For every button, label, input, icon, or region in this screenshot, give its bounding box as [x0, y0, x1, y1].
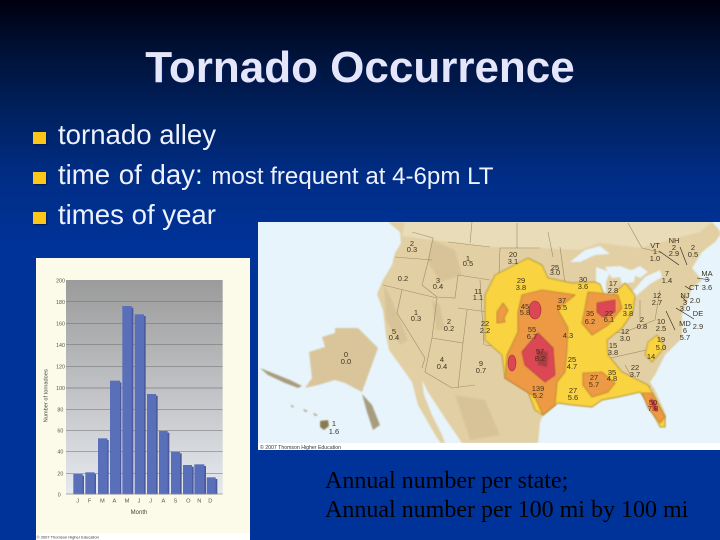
state frequency labels, east: 25 — [568, 355, 576, 364]
state frequency labels, west: 0.5 — [463, 259, 473, 268]
state frequency labels, east: 2.0 — [690, 296, 700, 305]
state frequency labels, east: 6.7 — [527, 332, 537, 341]
state frequency labels, east: 2.9 — [693, 322, 703, 331]
month labels: J — [149, 499, 152, 505]
bullet: tornado alley: tornado alley — [58, 119, 216, 150]
bullet marker 3 — [33, 212, 46, 224]
state frequency labels, west: 5 — [392, 327, 396, 336]
state frequency labels, east: 3.8 — [608, 348, 618, 357]
state frequency labels, west: 0.4 — [437, 362, 447, 371]
y axis title: Number of tornadoes — [43, 369, 49, 422]
state frequency labels, east: 37 — [558, 296, 566, 305]
state frequency labels, east: 1 — [653, 247, 657, 256]
y axis labels: 120 — [56, 365, 65, 371]
state frequency labels, east: 57 — [536, 347, 544, 356]
state frequency labels, west — [329, 239, 490, 436]
state frequency labels, west: 1.6 — [329, 427, 339, 436]
month labels: M — [100, 499, 105, 505]
state frequency labels, east: 35 — [586, 309, 594, 318]
state frequency labels, east: 3.6 — [578, 282, 588, 291]
Florida label: 50 — [649, 398, 657, 407]
bullet: time of day: time of day: most frequent at 4-6pm LT — [58, 159, 493, 190]
y axis labels: 40 — [57, 450, 63, 456]
state frequency labels, east: 3 — [705, 275, 709, 284]
state frequency labels, west: 0.2 — [398, 274, 408, 283]
state frequency labels, west: 4 — [440, 355, 444, 364]
state frequency labels, west: 0.4 — [389, 333, 399, 342]
y axis labels: 140 — [56, 343, 65, 349]
month labels: S — [173, 499, 177, 505]
y axis labels — [56, 278, 65, 498]
state frequency labels, west: 2 — [410, 239, 414, 248]
state frequency labels, east: 19 — [657, 335, 665, 344]
state frequency labels, west: 0.3 — [407, 245, 417, 254]
tornado frequency: yellow zone — [485, 258, 665, 427]
y axis labels: 180 — [56, 300, 65, 306]
state frequency labels, east: 3.0 — [620, 334, 630, 343]
state frequency labels, east: 10 — [657, 317, 665, 326]
state frequency labels, east: 5.8 — [520, 308, 530, 317]
state frequency labels, west: 1 — [466, 254, 470, 263]
panel: monthly tornado bar chart — [36, 258, 250, 540]
state frequency labels, west: 0.4 — [433, 282, 443, 291]
y axis labels: 160 — [56, 322, 65, 328]
month labels: J — [76, 499, 79, 505]
state frequency labels, east: 35 — [608, 368, 616, 377]
y axis labels: 200 — [56, 278, 65, 284]
state frequency labels, east — [508, 236, 713, 402]
state frequency labels, east: NH — [669, 236, 679, 245]
month labels: A — [112, 499, 116, 505]
state frequency labels, east: 3.8 — [516, 283, 526, 292]
state frequency labels, west: 0.2 — [444, 324, 454, 333]
state frequency labels, east: 30 — [579, 275, 587, 284]
state frequency labels, east: 2 — [672, 243, 676, 252]
state frequency labels, west: 2.2 — [480, 326, 490, 335]
state frequency labels, east: 5.6 — [568, 393, 578, 402]
state frequency labels, east: 17 — [609, 279, 617, 288]
state frequency labels, east: 3 — [683, 298, 687, 307]
state frequency labels, west: 3 — [436, 276, 440, 285]
bullet: times of year: times of year — [58, 199, 216, 230]
Great Lakes — [570, 246, 662, 302]
state frequency labels, east: 27 — [569, 386, 577, 395]
land: Canada tint — [402, 222, 712, 250]
tornado frequency: orange zones — [505, 290, 575, 415]
month labels: D — [208, 499, 212, 505]
state frequency labels, east: 2.7 — [652, 298, 662, 307]
state frequency labels, east: 8.2 — [535, 354, 545, 363]
state frequency labels, east: 3.6 — [702, 283, 712, 292]
state frequency labels, east: 1.4 — [662, 276, 672, 285]
tornado frequency: red zones — [522, 333, 555, 382]
state frequency labels, east: 14 — [647, 352, 655, 361]
y axis labels: 80 — [57, 407, 63, 413]
state frequency labels, east: 2.8 — [608, 286, 618, 295]
state borders — [383, 222, 662, 395]
state frequency labels, east: 20 — [509, 250, 517, 259]
state frequency labels, west: 0.7 — [476, 366, 486, 375]
state frequency labels, east: 12 — [621, 327, 629, 336]
land: Alaska panhandle and islands — [260, 368, 380, 430]
state frequency labels, east: 0.5 — [688, 250, 698, 259]
Florida label: 7.8 — [648, 404, 658, 413]
state frequency labels, east: 5.0 — [656, 343, 666, 352]
state frequency labels, east: 22 — [605, 309, 613, 318]
state frequency labels, west: 1.1 — [473, 293, 483, 302]
state frequency labels, east: 0.8 — [637, 322, 647, 331]
y axis labels: 0 — [58, 492, 61, 498]
x axis title: Month — [131, 510, 147, 516]
state frequency labels, east: VT — [650, 241, 660, 250]
state frequency labels, east: 15 — [609, 341, 617, 350]
month labels: J — [138, 499, 141, 505]
state frequency labels, west: 22 — [481, 319, 489, 328]
state frequency labels, west: 0.3 — [411, 314, 421, 323]
state frequency labels, east: 29 — [517, 276, 525, 285]
mountain shading — [384, 240, 500, 440]
state frequency labels, east: 3.1 — [508, 257, 518, 266]
state frequency labels, east: NJ — [680, 291, 690, 300]
state frequency labels, west: 11 — [474, 287, 482, 296]
bullet marker 1 — [33, 132, 46, 144]
state frequency labels, east: 5.5 — [557, 303, 567, 312]
month labels: N — [197, 499, 201, 505]
month labels — [76, 499, 212, 505]
state frequency labels, east: 6.2 — [585, 317, 595, 326]
state frequency labels, west: 9 — [479, 359, 483, 368]
state frequency labels, east: 22 — [631, 363, 639, 372]
panel: US tornado map — [258, 222, 720, 451]
land: North America — [377, 222, 720, 443]
state frequency labels, east: MA — [701, 269, 713, 278]
state frequency labels, east: 139 — [532, 384, 544, 393]
state frequency labels, west: 1 — [332, 419, 336, 428]
state frequency labels, east: 3.8 — [623, 309, 633, 318]
month labels: O — [186, 499, 191, 505]
chart credit: © 2007 Thomson Higher Education — [37, 535, 99, 540]
state frequency labels, east: DE — [693, 309, 703, 318]
state frequency labels, east: 4.3 — [563, 331, 573, 340]
month labels: F — [88, 499, 92, 505]
state frequency labels, east: 1.0 — [650, 254, 660, 263]
state frequency labels, east: 6 — [683, 326, 687, 335]
bullet marker 2 — [33, 172, 46, 184]
state frequency labels, east: 15 — [624, 302, 632, 311]
state frequency labels, east: 2.9 — [669, 249, 679, 258]
month labels: A — [161, 499, 165, 505]
state frequency labels, east: 5.2 — [533, 391, 543, 400]
state frequency labels, east: 12 — [653, 291, 661, 300]
state frequency labels, west: 0 — [344, 350, 348, 359]
state frequency labels, east: 3.7 — [630, 370, 640, 379]
land: Alaska — [305, 328, 378, 392]
Florida label — [648, 400, 658, 411]
state frequency labels, east: 5.7 — [680, 333, 690, 342]
state frequency labels, east: CT — [689, 283, 699, 292]
bar chart plot — [37, 278, 223, 540]
y axis labels: 100 — [56, 386, 65, 392]
state frequency labels, east: 4.7 — [567, 362, 577, 371]
state frequency labels, east: 45 — [521, 302, 529, 311]
state frequency labels, east: 25 — [551, 263, 559, 272]
map caption — [325, 468, 688, 523]
state frequency labels, east: 4.8 — [607, 374, 617, 383]
state frequency labels, east: 7 — [665, 269, 669, 278]
yellow zone: Carolinas — [645, 335, 665, 362]
state frequency labels, west: 0.0 — [341, 357, 351, 366]
map caption: Annual number per state; — [325, 468, 568, 494]
y axis labels: 20 — [57, 472, 63, 478]
state frequency labels, east: 55 — [528, 325, 536, 334]
state callout lines — [659, 247, 710, 330]
bullet list — [33, 119, 493, 230]
state frequency labels, west: 2 — [447, 317, 451, 326]
land: Hawaii — [320, 420, 329, 430]
state frequency labels, east: MD — [679, 319, 691, 328]
month labels: M — [125, 499, 130, 505]
map credit: © 2007 Thomson Higher Education — [260, 444, 341, 451]
state frequency labels, east: 3.0 — [680, 304, 690, 313]
state frequency labels, east: 2 — [640, 315, 644, 324]
state frequency labels, east: 6.1 — [604, 315, 614, 324]
state frequency labels, east: 5.7 — [589, 380, 599, 389]
state frequency labels, west: 1 — [414, 308, 418, 317]
map caption: Annual number per 100 mi by 100 mi — [325, 497, 688, 523]
y axis labels: 60 — [57, 429, 63, 435]
state frequency labels, east: 27 — [590, 373, 598, 382]
state frequency labels, east: 2.5 — [656, 324, 666, 333]
highest frequency core — [537, 350, 548, 367]
title: Tornado Occurrence — [145, 43, 575, 92]
state frequency labels, east: 3.0 — [550, 268, 560, 277]
state frequency labels, east: 2 — [691, 243, 695, 252]
